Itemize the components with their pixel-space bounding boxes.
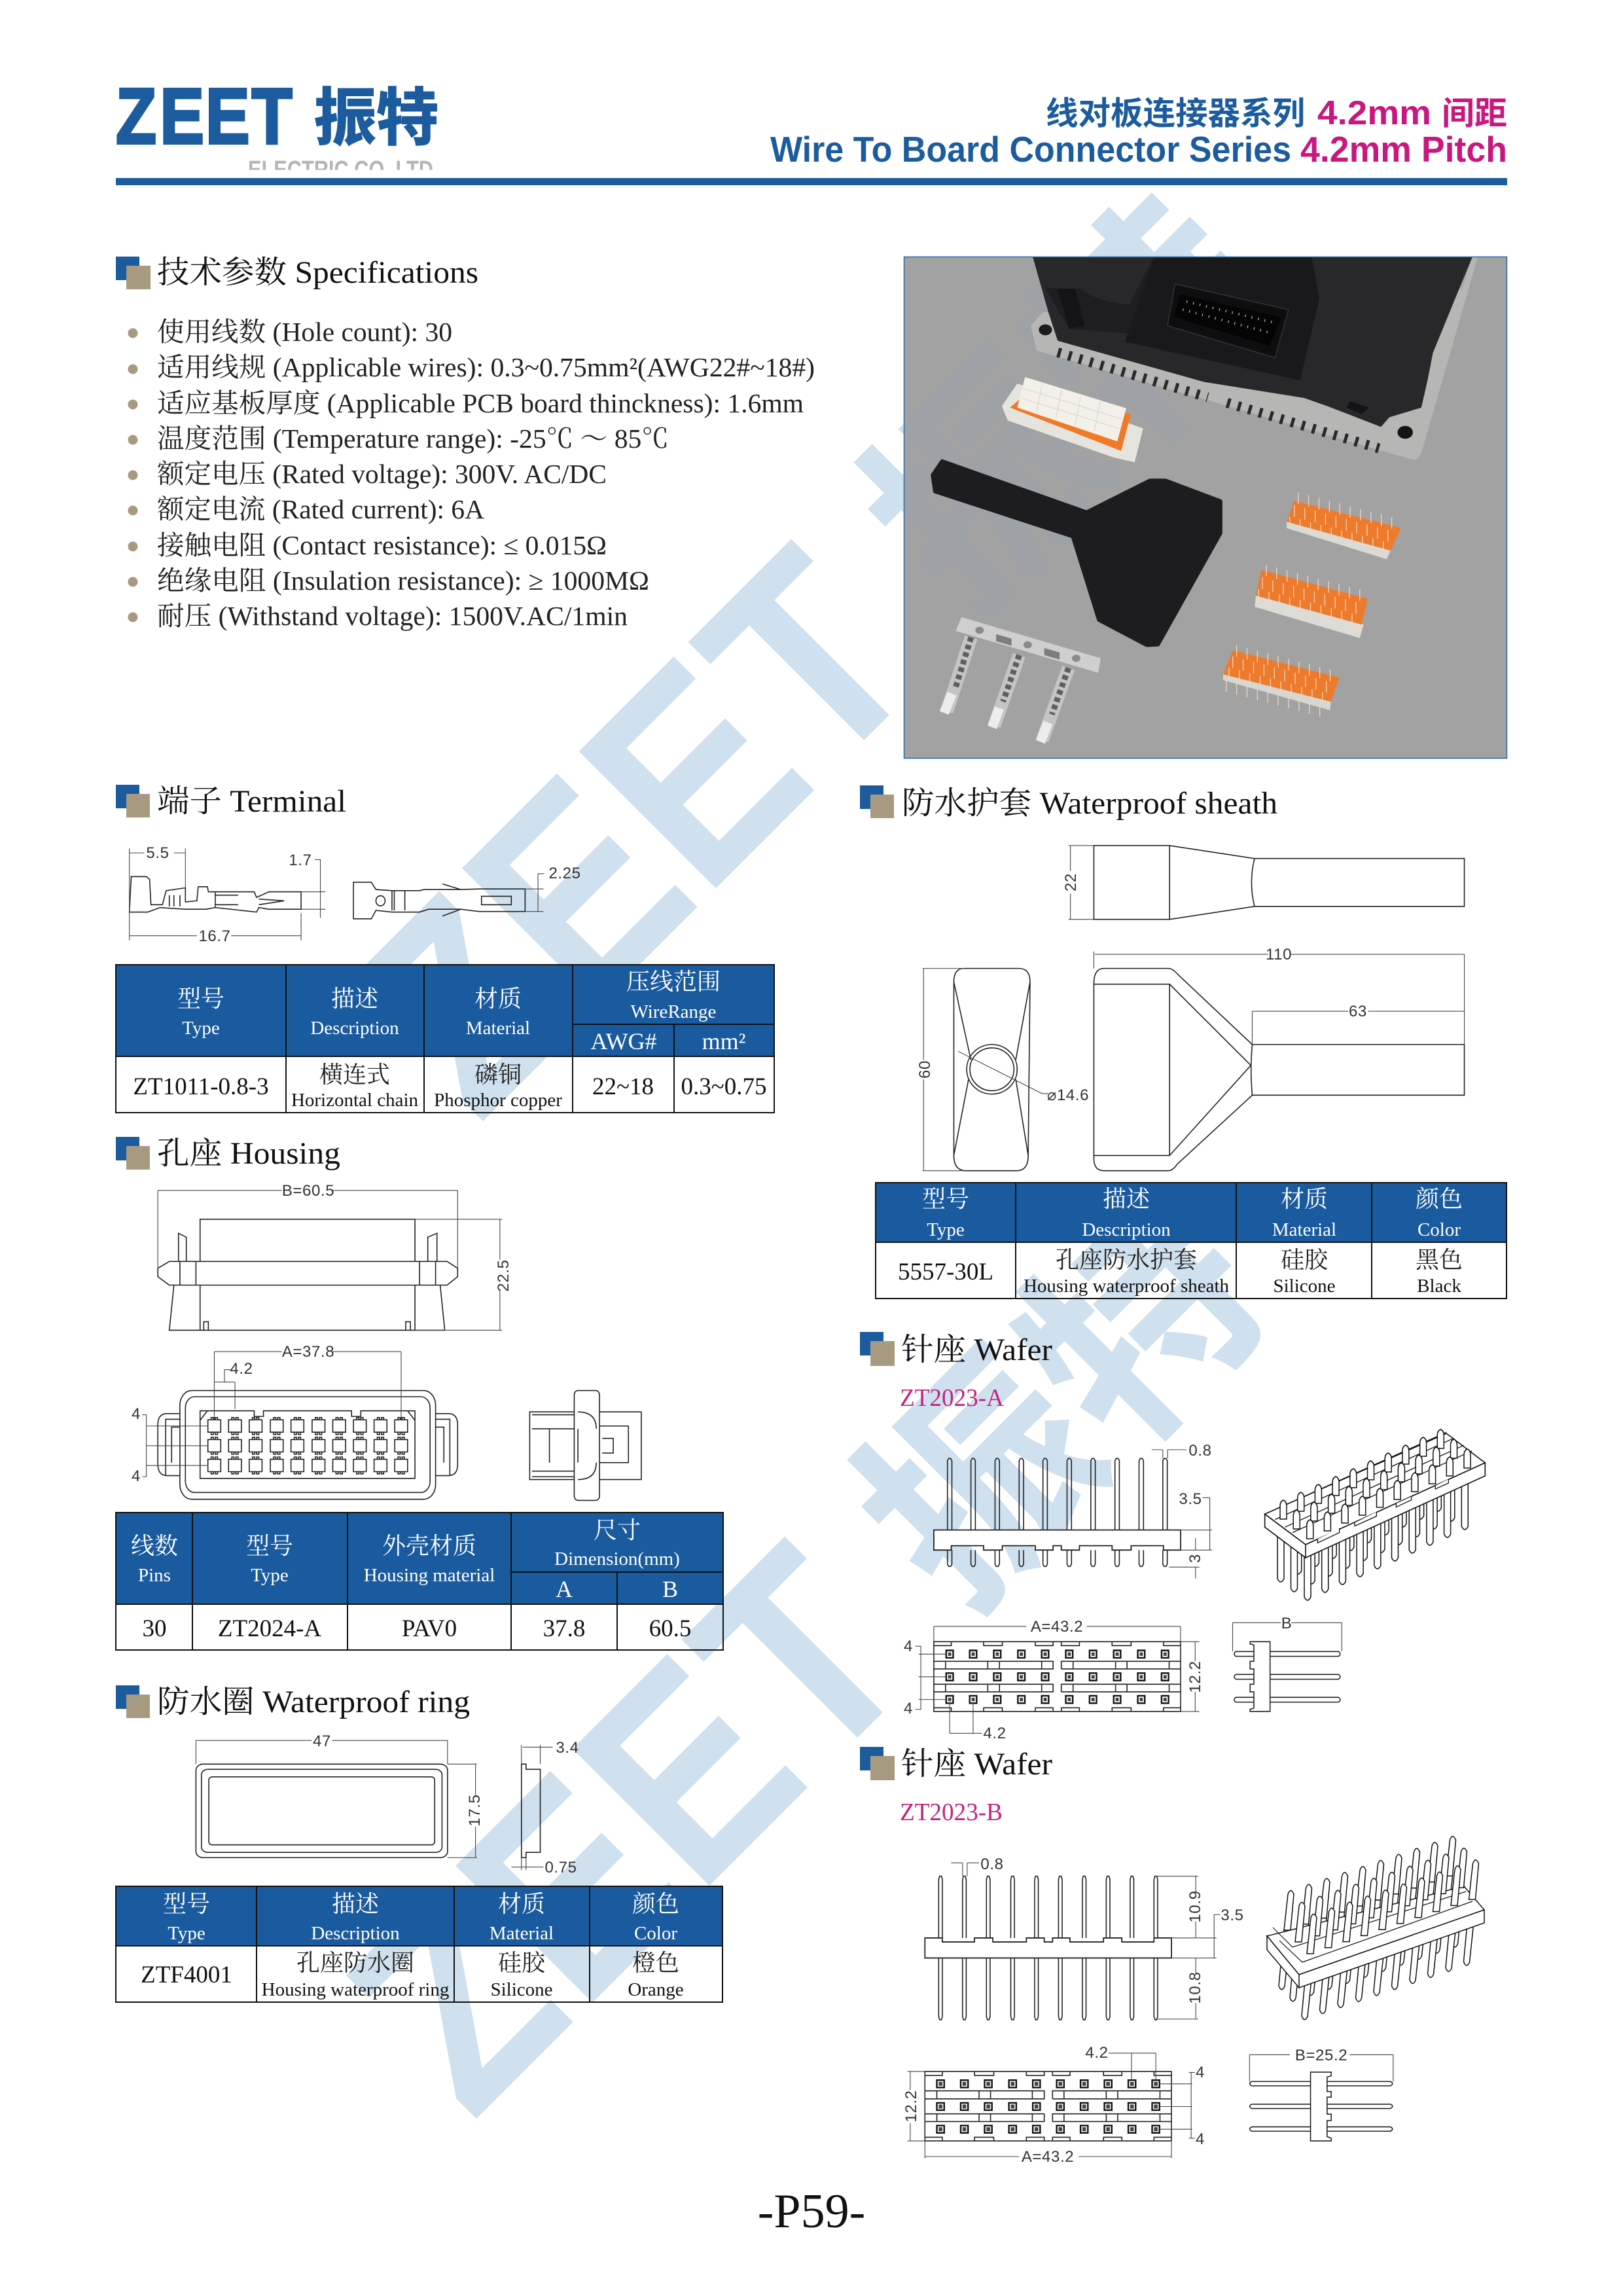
watermark row 2: 振特 bbox=[815, 1156, 1313, 1653]
housing front view drawing: 4.2 bbox=[230, 1360, 253, 1378]
wafer B bottom view drawing: 12.2 bbox=[902, 2090, 920, 2123]
header bbox=[116, 86, 1507, 185]
sheath dimension drawings: 60 bbox=[916, 1060, 934, 1079]
sheath table: Color bbox=[1418, 1219, 1461, 1240]
housing table: 30 bbox=[143, 1615, 166, 1642]
wafer B bottom view drawing: A=43.2 bbox=[1022, 2148, 1074, 2166]
ring dimension drawing: 3.4 bbox=[556, 1739, 579, 1757]
specification list: 接触电阻 (Contact resistance): ≤ 0.015Ω bbox=[157, 530, 607, 560]
terminal table: 描述 bbox=[331, 986, 378, 1012]
wafer B front view drawing: 10.9 bbox=[1186, 1890, 1204, 1923]
wafer B bottom view drawing: 4.2 bbox=[1085, 2044, 1109, 2062]
photo: white housing with orange ring bbox=[1002, 377, 1143, 462]
terminal dimension drawing: 16.7 bbox=[198, 927, 231, 945]
sheath table: Type bbox=[927, 1219, 965, 1240]
terminal table: 横连式 bbox=[319, 1062, 390, 1088]
background watermark bbox=[291, 130, 1336, 2166]
heading: waterproof sheath: 防水护套 Waterproof sheath bbox=[902, 786, 1277, 821]
sheath table: 描述 bbox=[1103, 1186, 1150, 1212]
ring table: 孔座防水圈 bbox=[296, 1950, 414, 1976]
housing table: Dimension(mm) bbox=[554, 1549, 680, 1570]
ring table: Description bbox=[311, 1923, 400, 1944]
terminal dimension drawing: 1.7 bbox=[289, 852, 312, 869]
ring table: Orange bbox=[628, 1979, 684, 2000]
sheath table: 颜色 bbox=[1416, 1186, 1463, 1212]
wafer B side view drawing: B=25.2 bbox=[1295, 2047, 1347, 2064]
title english: Wire To Board Connector Series bbox=[770, 129, 1291, 170]
ring table: 材质 bbox=[498, 1891, 545, 1917]
panel: specifications bbox=[116, 255, 815, 631]
header rule bbox=[116, 178, 1507, 185]
housing top view drawing: B=60.5 bbox=[282, 1182, 334, 1200]
sheath table: 材质 bbox=[1281, 1186, 1328, 1212]
sheath table: 黑色 bbox=[1416, 1247, 1463, 1273]
title chinese: 线对板连接器系列 bbox=[1046, 96, 1305, 132]
housing table: PAV0 bbox=[402, 1615, 457, 1642]
housing table: 型号 bbox=[246, 1533, 293, 1559]
wafer A 3D view bbox=[1265, 1429, 1485, 1600]
terminal dimension drawing: 5.5 bbox=[146, 844, 169, 862]
housing front view drawing bbox=[132, 1343, 457, 1499]
housing front view drawing: 4 bbox=[132, 1405, 141, 1423]
ring table: Type bbox=[168, 1923, 205, 1944]
heading: specifications: 技术参数 Specifications bbox=[157, 255, 478, 290]
ring table: Material bbox=[490, 1923, 554, 1944]
sheath table: 型号 bbox=[922, 1186, 969, 1212]
terminal table: 压线范围 bbox=[626, 969, 721, 995]
wafer B front view drawing: 3.5 bbox=[1221, 1907, 1244, 1924]
wafer B bottom view drawing: 4 bbox=[1196, 2064, 1205, 2081]
terminal table: Horizontal chain bbox=[291, 1090, 419, 1111]
terminal table: 材质 bbox=[474, 986, 522, 1012]
watermark row 2: ZEET bbox=[291, 1491, 966, 2166]
wafer B front view drawing: 10.8 bbox=[1186, 1971, 1204, 2004]
terminal table: Type bbox=[182, 1018, 220, 1039]
photo: orange wafer 3 bbox=[1223, 645, 1340, 717]
terminal table bbox=[116, 965, 774, 1113]
specification list bbox=[128, 317, 815, 631]
ring table: Silicone bbox=[490, 1979, 553, 2000]
sheath table: 硅胶 bbox=[1281, 1247, 1329, 1273]
photo: orange wafer 2 bbox=[1255, 565, 1368, 638]
sheath table: Description bbox=[1082, 1219, 1171, 1240]
housing top view drawing bbox=[158, 1182, 512, 1330]
housing table: 线数 bbox=[131, 1533, 178, 1559]
wafer B front view drawing bbox=[925, 1856, 1244, 2020]
photo: orange wafer 1 bbox=[1287, 492, 1401, 560]
ring table: 型号 bbox=[163, 1891, 210, 1917]
model label A: ZT2023-A bbox=[900, 1384, 1005, 1412]
terminal table: 0.3~0.75 bbox=[681, 1073, 767, 1100]
watermark row 1: 振特 bbox=[822, 158, 1319, 656]
ring table: Housing waterproof ring bbox=[262, 1979, 449, 2000]
wafer A side view drawing bbox=[1232, 1615, 1342, 1712]
heading: terminal: 端子 Terminal bbox=[157, 784, 346, 819]
housing table: 尺寸 bbox=[594, 1517, 641, 1543]
housing table: 外壳材质 bbox=[382, 1533, 476, 1559]
terminal table: mm² bbox=[702, 1028, 745, 1054]
wafer A front view drawing: 3.5 bbox=[1179, 1490, 1202, 1508]
terminal table: 22~18 bbox=[592, 1073, 654, 1100]
specification list: 额定电流 (Rated current): 6A bbox=[157, 494, 484, 524]
housing table: A bbox=[556, 1576, 573, 1602]
sheath table: 5557-30L bbox=[898, 1259, 993, 1285]
specification list: 适用线规 (Applicable wires): 0.3~0.75mm²(AWG22#~18#) bbox=[157, 352, 815, 382]
housing top view drawing: 22.5 bbox=[495, 1259, 512, 1292]
watermark row 1 bbox=[298, 130, 1336, 1169]
housing side view drawing bbox=[529, 1391, 641, 1500]
ring table: 描述 bbox=[332, 1891, 379, 1917]
ring table: 橙色 bbox=[632, 1950, 679, 1976]
photo: control box bbox=[1031, 257, 1478, 460]
heading: waterproof ring: 防水圈 Waterproof ring bbox=[157, 1685, 470, 1719]
specification list: 适应基板厚度 (Applicable PCB board thinckness): 1.6mm bbox=[157, 388, 804, 418]
housing table: Housing material bbox=[364, 1565, 495, 1586]
terminal table: Description bbox=[310, 1018, 399, 1039]
wafer A front view drawing: 0.8 bbox=[1188, 1442, 1212, 1460]
logo: 振特 bbox=[314, 84, 438, 153]
housing table: 60.5 bbox=[649, 1615, 691, 1642]
housing table: ZT2024-A bbox=[218, 1615, 321, 1642]
specification list: 绝缘电阻 (Insulation resistance): ≥ 1000MΩ bbox=[157, 565, 649, 596]
wafer A front view drawing: 3 bbox=[1186, 1554, 1204, 1563]
sheath table: Black bbox=[1417, 1276, 1461, 1297]
specification list: 耐压 (Withstand voltage): 1500V.AC/1min bbox=[157, 601, 628, 631]
specification list: 使用线数 (Hole count): 30 bbox=[157, 317, 452, 347]
terminal table: AWG# bbox=[590, 1028, 657, 1054]
wafer A bottom view drawing: 4 bbox=[904, 1638, 913, 1655]
sheath dimension drawings: ⌀14.6 bbox=[1047, 1086, 1089, 1104]
title chinese: 4.2mm bbox=[1317, 94, 1431, 132]
photo: black sheath bbox=[933, 461, 1220, 645]
wafer A bottom view drawing: 4.2 bbox=[983, 1725, 1007, 1742]
panel: housing bbox=[116, 1136, 723, 1650]
specification list: 温度范围 (Temperature range): -25℃ ～ 85℃ bbox=[157, 423, 669, 454]
ring table: 硅胶 bbox=[498, 1950, 546, 1976]
wafer A bottom view drawing: 12.2 bbox=[1186, 1660, 1204, 1693]
panel: wafer A bbox=[860, 1332, 1485, 1742]
terminal table: ZT1011-0.8-3 bbox=[133, 1073, 269, 1100]
terminal table: 型号 bbox=[177, 986, 224, 1012]
specification list: 额定电压 (Rated voltage): 300V. AC/DC bbox=[157, 459, 607, 489]
wafer B bottom view drawing bbox=[902, 2044, 1205, 2166]
ring dimension drawing bbox=[196, 1732, 579, 1876]
sheath dimension drawings: 22 bbox=[1062, 873, 1080, 891]
ring dimension drawing: 47 bbox=[313, 1732, 331, 1750]
panel: wafer B bbox=[860, 1747, 1484, 2166]
title chinese: 间距 bbox=[1442, 96, 1507, 132]
wafer B 3D view bbox=[1267, 1837, 1484, 2020]
wafer B bottom view drawing: 4 bbox=[1196, 2130, 1205, 2148]
sheath dimension drawings bbox=[916, 846, 1465, 1171]
logo bbox=[116, 86, 437, 170]
wafer B side view drawing bbox=[1249, 2047, 1393, 2141]
housing table: 37.8 bbox=[543, 1615, 585, 1642]
sheath table: Material bbox=[1272, 1219, 1336, 1240]
sheath table: Housing waterproof sheath bbox=[1024, 1276, 1230, 1297]
wafer A bottom view drawing: 4 bbox=[904, 1700, 913, 1717]
product photo bbox=[903, 257, 1508, 759]
sheath table bbox=[876, 1183, 1507, 1299]
sheath dimension drawings: 110 bbox=[1266, 946, 1292, 963]
panel: waterproof sheath bbox=[860, 785, 1507, 1299]
terminal table: Material bbox=[466, 1018, 530, 1039]
title english: 4.2mm Pitch bbox=[1300, 129, 1507, 170]
terminal dimension drawing bbox=[130, 844, 581, 945]
terminal dimension drawing: 2.25 bbox=[548, 865, 581, 882]
housing front view drawing: 4 bbox=[132, 1467, 141, 1485]
page number: -P59- bbox=[758, 2185, 865, 2238]
logo: ELECTRIC CO.,LTD bbox=[248, 156, 433, 184]
heading: wafer A: 针座 Wafer bbox=[901, 1333, 1052, 1367]
sheath table: Silicone bbox=[1273, 1276, 1336, 1297]
wafer B front view drawing: 0.8 bbox=[980, 1856, 1004, 1873]
wafer A bottom view drawing: A=43.2 bbox=[1031, 1618, 1083, 1636]
ring table: Color bbox=[634, 1923, 677, 1944]
photo: metal terminals bbox=[944, 617, 1101, 742]
terminal table: 磷铜 bbox=[474, 1062, 522, 1088]
logo: ZEET bbox=[116, 72, 293, 160]
terminal table: Phosphor copper bbox=[434, 1090, 562, 1111]
panel: terminal bbox=[116, 784, 774, 1113]
housing table bbox=[116, 1513, 723, 1650]
wafer A front view drawing bbox=[934, 1442, 1212, 1579]
housing table: Pins bbox=[138, 1565, 171, 1586]
ring table: ZTF4001 bbox=[141, 1962, 232, 1988]
wafer A bottom view drawing bbox=[904, 1618, 1204, 1742]
product photo: 振特 bbox=[822, 158, 1319, 656]
ring dimension drawing: 17.5 bbox=[466, 1794, 484, 1827]
title chinese bbox=[1046, 94, 1507, 132]
sheath table: 孔座防水护套 bbox=[1056, 1247, 1197, 1273]
wafer A side view drawing: B bbox=[1281, 1615, 1292, 1632]
housing table: B bbox=[662, 1576, 678, 1602]
housing table: Type bbox=[251, 1565, 289, 1586]
ring dimension drawing: 0.75 bbox=[544, 1859, 577, 1876]
watermark row 2 bbox=[291, 1128, 1329, 2166]
panel: waterproof ring bbox=[116, 1685, 722, 2002]
housing front view drawing: A=37.8 bbox=[282, 1343, 334, 1361]
heading: wafer B: 针座 Wafer bbox=[901, 1747, 1052, 1782]
sheath dimension drawings: 63 bbox=[1349, 1003, 1367, 1020]
terminal table: WireRange bbox=[631, 1001, 716, 1022]
ring table bbox=[116, 1886, 722, 2002]
heading: housing: 孔座 Housing bbox=[157, 1136, 340, 1171]
model label B: ZT2023-B bbox=[900, 1799, 1003, 1826]
watermark row 1: ZEET bbox=[298, 493, 972, 1169]
ring table: 颜色 bbox=[632, 1891, 679, 1917]
